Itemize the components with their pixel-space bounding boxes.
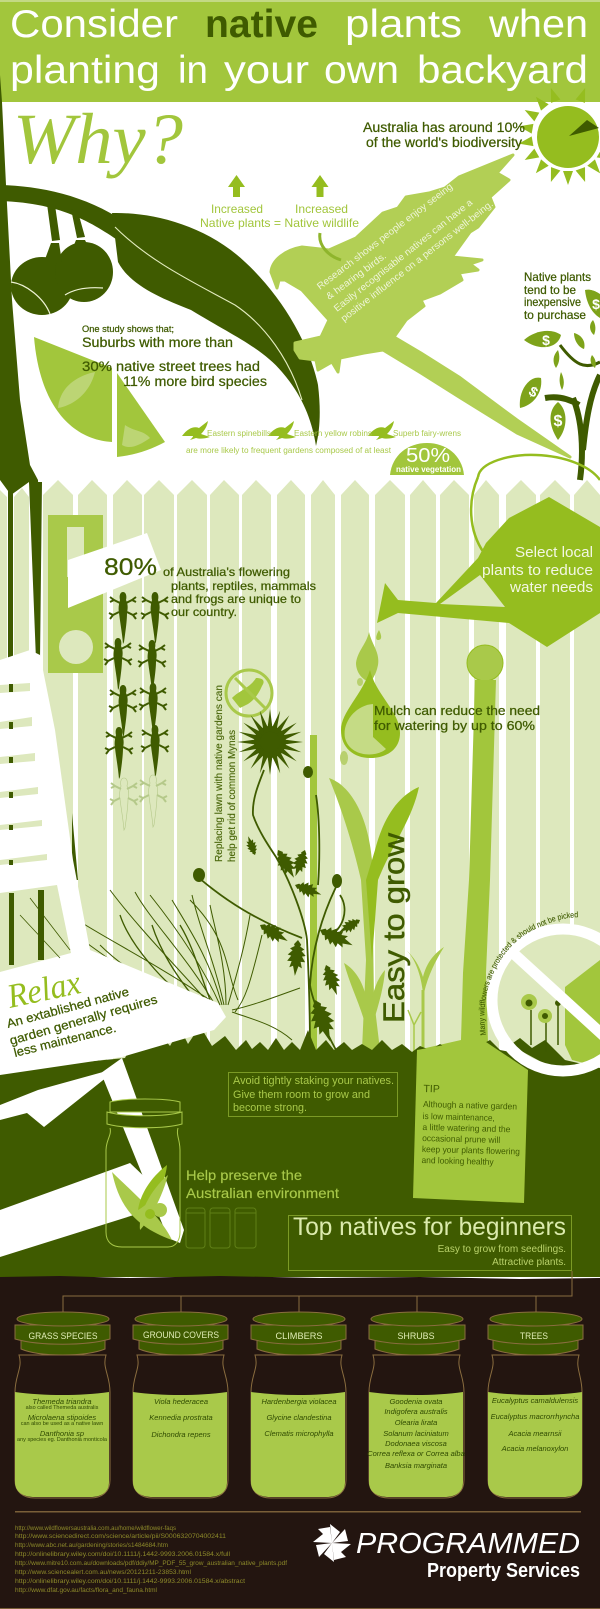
mynas text: Replacing lawn with native gardens can <box>213 685 225 862</box>
80 percent text: plants, reptiles, mammals <box>171 579 316 593</box>
biodiversity text: Australia has around 10% <box>363 120 525 135</box>
80 percent text: of Australia's flowering <box>163 565 290 579</box>
source list: http://onlinelibrary.wiley.com/doi/10.1111/j.1442-9993.2006.01584.x/full <box>15 1551 230 1558</box>
jar: ground covers: Viola hederacea <box>154 1397 208 1406</box>
buds <box>193 868 205 882</box>
spade blade overlap <box>413 1042 528 1203</box>
title: in <box>178 49 208 92</box>
50 percent dome: native vegetation <box>396 465 461 474</box>
title: plants <box>345 3 462 46</box>
80 percent text: and frogs are unique to <box>171 592 301 606</box>
jar: ground covers: GROUND COVERS <box>143 1330 219 1341</box>
watering can text: water needs <box>509 580 593 596</box>
title: planting <box>10 49 160 92</box>
jar: climbers <box>251 1312 346 1498</box>
title <box>10 3 588 92</box>
geckos <box>104 592 169 830</box>
jar: trees: Acacia melanoxylon <box>501 1444 568 1453</box>
bottom edge <box>0 1608 600 1609</box>
programmed logo <box>313 1524 580 1582</box>
jar: shrubs <box>367 1312 465 1498</box>
jar: climbers: Glycine clandestina <box>266 1413 332 1422</box>
top natives box: Attractive plants. <box>492 1257 566 1268</box>
bird text: Easily recognisable natives can have a <box>332 197 476 314</box>
gumnut bodies <box>11 240 113 315</box>
sprouts <box>329 778 444 1052</box>
programmed logo: Property Services <box>427 1560 580 1582</box>
relax text: garden generally requires <box>8 992 159 1048</box>
exclamation sign <box>48 515 161 673</box>
inexpensive text <box>524 270 591 322</box>
tip text: occasional prune will <box>422 1133 500 1145</box>
garden chair <box>0 650 226 1257</box>
bird text: & hearing birds. <box>324 251 389 302</box>
relax text: Relax <box>3 964 84 1016</box>
biodiversity text: of the world's biodiversity <box>366 135 522 150</box>
header band <box>0 0 600 102</box>
branch and gumnuts <box>0 185 125 315</box>
staking callout: Avoid tightly staking your natives. <box>233 1075 394 1087</box>
dollar signs: $ <box>526 383 541 401</box>
ground <box>0 1026 600 1277</box>
watering can <box>376 455 600 647</box>
bird text <box>315 181 496 324</box>
80 percent text: 80% <box>104 554 157 581</box>
watering can text: Select local <box>515 545 593 561</box>
preserved leaves <box>112 1165 172 1240</box>
jar: shrubs: Indigofera australis <box>384 1407 448 1416</box>
large gum leaf <box>112 213 320 446</box>
preserve text: Help preserve the <box>186 1167 302 1183</box>
small bird species row: Eastern yellow robins <box>294 429 372 438</box>
dollar signs: $ <box>542 332 550 348</box>
source list: http://www.abc.net.au/gardening/stories/s1484684.htm <box>15 1542 168 1549</box>
small empty jars <box>186 1208 256 1248</box>
jar: grass species <box>15 1312 110 1498</box>
dollar signs: $ <box>592 296 600 312</box>
no picking wildflowers symbol <box>492 929 600 1075</box>
bird text: positive influence on a persons well-being. <box>339 199 496 324</box>
native plants equation <box>200 202 359 230</box>
staking callout <box>228 1072 398 1116</box>
jar: ground covers: Dichondra repens <box>151 1430 211 1439</box>
top natives box: Easy to grow from seedlings. <box>438 1244 566 1255</box>
source list: http://www.mitre10.com.au/downloads/pdf/ddiy/MP_PDF_55_grow_australian_native_plants.pdf <box>15 1560 287 1567</box>
native plants equation: Increased <box>295 202 348 216</box>
dollar signs: $ <box>554 413 563 430</box>
jar: ground covers: Kennedia prostrata <box>149 1413 213 1422</box>
jagged leaves <box>286 939 307 977</box>
pie chart: 30 percent <box>34 337 165 457</box>
top natives box <box>288 1213 572 1270</box>
study text <box>82 324 233 350</box>
tip text <box>421 1083 522 1168</box>
small bird species row: are more likely to frequent gardens composed of at least <box>186 446 392 455</box>
jar: trees: TREES <box>520 1331 548 1342</box>
jar: shrubs: Correa reflexa or Correa alba <box>367 1449 465 1458</box>
mynas text: help get rid of common Mynas <box>226 730 238 862</box>
jar: grass species: can also be used as a native lawn <box>21 1421 103 1427</box>
mynas text <box>213 685 238 862</box>
staking callout: Give them room to grow and <box>233 1089 370 1101</box>
wildflowers <box>521 994 561 1052</box>
relax text <box>3 964 159 1060</box>
why heading: Why? <box>13 99 183 179</box>
jar: shrubs: SHRUBS <box>398 1331 434 1342</box>
tip text: keep your plants flowering <box>422 1144 520 1157</box>
mulch text <box>374 703 540 733</box>
grass clump <box>62 890 300 1040</box>
no mynas symbol <box>226 670 272 716</box>
water drop <box>340 632 400 765</box>
small bird species row: Eastern spinebills <box>207 429 271 438</box>
50 percent dome <box>390 443 464 475</box>
footer divider <box>15 1511 581 1512</box>
source list: http://www.sciencedirect.com/science/article/pii/S0006320704002411 <box>15 1533 227 1540</box>
title: native <box>205 3 318 46</box>
staking callout: become strong. <box>233 1102 307 1114</box>
percent text: 30% <box>82 359 112 374</box>
title: when <box>488 3 588 46</box>
source list: http://www.wildflowersaustralia.com.au/home/wildflower-faqs <box>15 1525 176 1532</box>
inexpensive text: Native plants <box>524 270 591 284</box>
source list: http://onlinelibrary.wiley.com/doi/10.1111/j.1442-9993.2006.01584.x/abstract <box>15 1578 245 1585</box>
jar: trees: Eucalyptus camaldulensis <box>492 1396 578 1405</box>
jar: trees <box>488 1312 583 1498</box>
study text: Suburbs with more than <box>82 335 233 350</box>
source list: http://www.sciencealert.com.au/news/20121211-23853.html <box>15 1569 191 1576</box>
preservation jar <box>106 1099 182 1247</box>
title: own <box>324 49 399 92</box>
dark footer background <box>0 1276 600 1609</box>
spade <box>413 645 528 1203</box>
source list: http://www.dfat.gov.au/facts/flora_and_fauna.html <box>15 1587 157 1594</box>
mulch text: for watering by up to 60% <box>374 718 535 733</box>
jar: grass species: GRASS SPECIES <box>28 1331 98 1342</box>
tip text: is low maintenance, <box>423 1111 495 1123</box>
small bird species row: Superb fairy-wrens <box>393 429 461 438</box>
source list <box>15 1525 287 1594</box>
tall flower plant <box>193 709 363 1070</box>
top natives box: Top natives for beginners <box>293 1213 566 1241</box>
jar: climbers: Clematis microphylla <box>264 1429 334 1438</box>
tip text: a little watering and the <box>422 1122 511 1134</box>
50 percent dome: 50% <box>406 445 450 467</box>
easy to grow: Easy to grow <box>378 833 411 1023</box>
percent text: 11% more bird species <box>123 374 267 389</box>
arrows: increased plants and wildlife <box>228 175 328 197</box>
study text: One study shows that; <box>82 324 174 335</box>
tip text: Although a native garden <box>423 1099 517 1111</box>
jar: shrubs: Goodenia ovata <box>390 1397 442 1406</box>
jar: grass species: any species eg. Danthonia monticola <box>17 1437 108 1443</box>
native plants equation: Increased <box>211 202 263 216</box>
picket fence <box>0 480 600 1060</box>
title: your <box>224 49 309 92</box>
preserve text: Australian environment <box>186 1185 339 1201</box>
programmed logo: PROGRAMMED <box>356 1528 580 1560</box>
native plants equation: Native plants = Native wildlife <box>200 216 359 230</box>
small bird species row <box>182 421 461 455</box>
jar: ground covers <box>133 1312 228 1498</box>
80 percent text <box>104 554 316 619</box>
jar: shrubs: Olearia lirata <box>395 1418 437 1427</box>
watering can text: plants to reduce <box>482 563 593 579</box>
jar: shrubs: Dodonaea viscosa <box>385 1439 447 1448</box>
jar: grass species: Themeda triandra <box>32 1397 92 1406</box>
jar: climbers: Hardenbergia violacea <box>261 1397 337 1406</box>
jar: grass species: Microlaena stipoides <box>28 1413 96 1422</box>
chair slats <box>0 683 71 972</box>
bird: large parrot <box>271 155 570 457</box>
money leaves <box>520 290 600 440</box>
inexpensive text: tend to be <box>524 283 576 297</box>
money tree <box>520 290 600 480</box>
biodiversity text <box>363 120 525 150</box>
dark flower head <box>237 709 303 775</box>
tip text: TIP <box>423 1083 440 1095</box>
inexpensive text: to purchase <box>524 308 586 322</box>
mulch text: Mulch can reduce the need <box>374 703 540 718</box>
sun with biodiversity wedge <box>518 86 600 185</box>
tip text: and looking healthy <box>421 1155 494 1167</box>
jar: grass species: Danthonia sp <box>40 1429 84 1438</box>
bird text: Research shows people enjoy seeing <box>315 181 455 292</box>
relax text: An extablished native <box>5 985 131 1031</box>
watering can text <box>482 545 593 596</box>
jar: shrubs: Solanum laciniatum <box>383 1429 449 1438</box>
jar: grass species: also called Themeda australis <box>26 1405 99 1411</box>
jar: shrubs: Banksia marginata <box>385 1461 447 1470</box>
jar: trees: Acacia mearnsii <box>508 1429 562 1438</box>
percent text: native street trees had <box>116 359 260 374</box>
jar: climbers: CLIMBERS <box>276 1331 322 1342</box>
dollar signs <box>526 296 600 430</box>
preserve text <box>186 1167 339 1201</box>
title: Consider <box>10 3 178 46</box>
title: backyard <box>417 49 588 92</box>
80 percent text: our country. <box>171 605 237 619</box>
percent text <box>82 359 267 389</box>
relax text: less maintenance. <box>12 1021 118 1060</box>
protected wildflowers curved text: Many wildflowers are protected & should not be picked <box>478 911 578 1036</box>
jar connector lines <box>63 1271 572 1312</box>
tree trunk <box>0 75 78 965</box>
jar: trees: Eucalyptus macrorrhyncha <box>491 1412 579 1421</box>
inexpensive text: inexpensive <box>524 295 581 309</box>
